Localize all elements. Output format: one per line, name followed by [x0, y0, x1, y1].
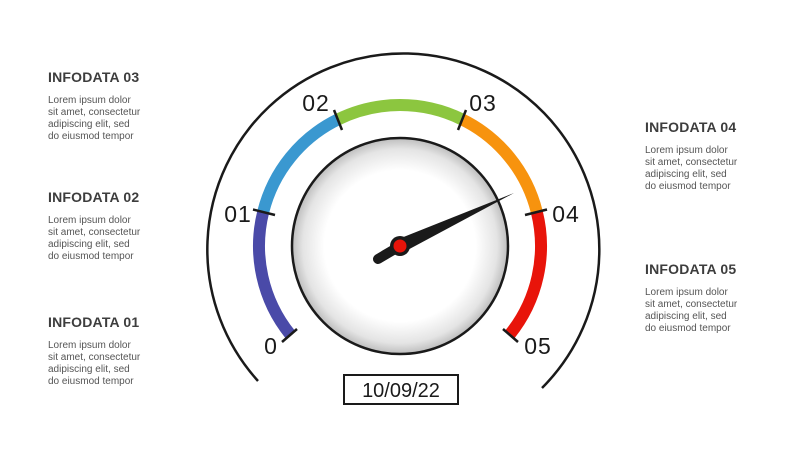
text block: infodata 05 — [645, 261, 738, 334]
text block: infodata 05: Lorem ipsum dolor — [645, 287, 728, 298]
text block: infodata 04: INFODATA 04 — [645, 119, 736, 135]
text block: infodata 02: INFODATA 02 — [48, 189, 139, 205]
text block: infodata 02: sit amet, consectetur — [48, 227, 140, 238]
text block: infodata 04: sit amet, consectetur — [645, 157, 737, 168]
text block: infodata 03 — [48, 69, 140, 142]
dial face — [292, 138, 508, 354]
text block: infodata 03: Lorem ipsum dolor — [48, 95, 131, 106]
needle — [378, 193, 514, 259]
text block: infodata 04: adipiscing elit, sed — [645, 169, 727, 180]
scale labels — [224, 90, 580, 359]
text block: infodata 02 — [48, 189, 140, 262]
text block: infodata 01: INFODATA 01 — [48, 314, 139, 330]
text block: infodata 01: adipiscing elit, sed — [48, 364, 130, 375]
ticks — [253, 110, 547, 342]
scale labels: 03 — [469, 90, 497, 116]
text block: infodata 04: do eiusmod tempor — [645, 181, 731, 192]
scale labels: 04 — [552, 201, 580, 227]
text block: infodata 02: adipiscing elit, sed — [48, 239, 130, 250]
text block: infodata 01 — [48, 314, 140, 387]
scale labels: 05 — [524, 333, 552, 359]
text block: infodata 05: INFODATA 05 — [645, 261, 736, 277]
scale labels: 0 — [264, 333, 278, 359]
text block: infodata 03: do eiusmod tempor — [48, 131, 134, 142]
text block: infodata 02: do eiusmod tempor — [48, 251, 134, 262]
outer arc — [207, 53, 599, 388]
text block: infodata 03: adipiscing elit, sed — [48, 119, 130, 130]
date box — [344, 375, 458, 404]
text block: infodata 01: Lorem ipsum dolor — [48, 340, 131, 351]
scale labels: 02 — [302, 90, 330, 116]
colored scale arc — [259, 105, 541, 335]
text block: infodata 05: sit amet, consectetur — [645, 299, 737, 310]
text block: infodata 03: sit amet, consectetur — [48, 107, 140, 118]
text block: infodata 02: Lorem ipsum dolor — [48, 215, 131, 226]
scale labels: 01 — [224, 201, 252, 227]
text block: infodata 03: INFODATA 03 — [48, 69, 139, 85]
text block: infodata 04 — [645, 119, 738, 192]
text block: infodata 04: Lorem ipsum dolor — [645, 145, 728, 156]
date box: 10/09/22 — [362, 380, 440, 402]
text block: infodata 01: do eiusmod tempor — [48, 376, 134, 387]
text block: infodata 05: do eiusmod tempor — [645, 323, 731, 334]
text block: infodata 05: adipiscing elit, sed — [645, 311, 727, 322]
text block: infodata 01: sit amet, consectetur — [48, 352, 140, 363]
